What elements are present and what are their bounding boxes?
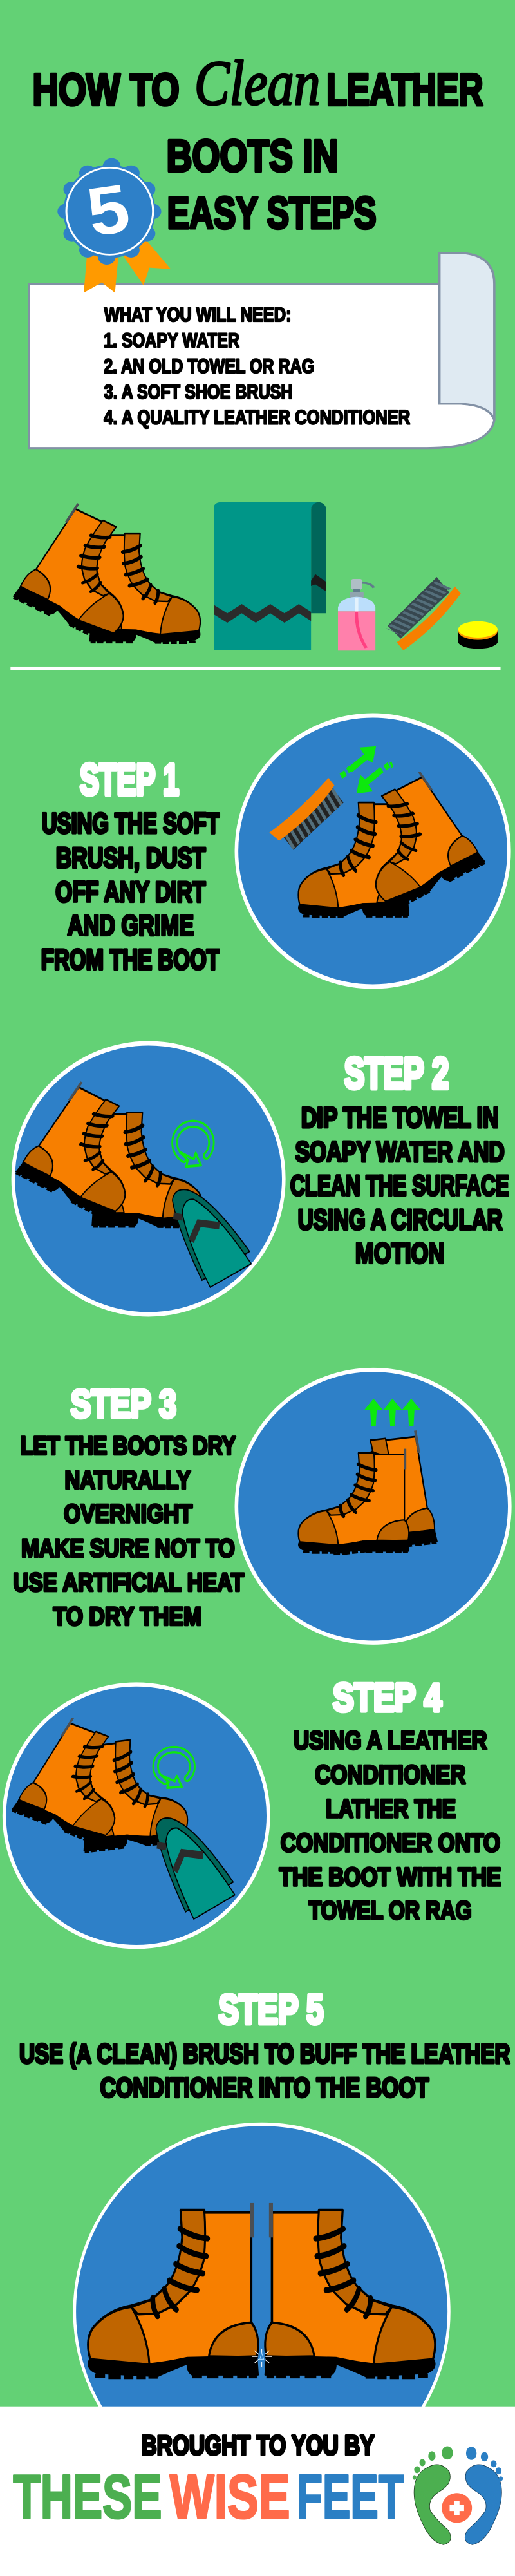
step 4 text bbox=[279, 1727, 501, 1926]
icon: soap spray bottle bbox=[338, 579, 375, 650]
logo wordmark: THESE bbox=[13, 2461, 162, 2532]
title: BOOTS IN bbox=[167, 130, 339, 181]
boots bbox=[10, 1703, 187, 1862]
step 2 text: USING A CIRCULAR bbox=[298, 1203, 503, 1236]
step 4 heading: STEP 4 bbox=[333, 1676, 442, 1720]
step 5 illustration circle bbox=[75, 2125, 449, 2499]
step 4 text: USING A LEATHER bbox=[294, 1727, 487, 1756]
right boot bbox=[265, 2203, 435, 2379]
step 3 text: TO DRY THEM bbox=[53, 1603, 201, 1631]
step 4 illustration circle bbox=[5, 1685, 268, 1947]
step 1 illustration circle bbox=[236, 715, 509, 987]
supplies list: 4. A QUALITY LEATHER CONDITIONER bbox=[104, 406, 410, 428]
title: EASY STEPS bbox=[167, 187, 377, 238]
step 3 text: USE ARTIFICIAL HEAT bbox=[13, 1568, 244, 1597]
step 1 text bbox=[41, 807, 220, 976]
supplies list bbox=[104, 303, 410, 428]
icon: shine sparkle bbox=[252, 2349, 272, 2367]
logo wordmark: WISE bbox=[170, 2461, 290, 2532]
footer: brought to you by bbox=[0, 2407, 515, 2576]
panel: step 1 bbox=[41, 715, 509, 987]
icon: towel rubbing boot bbox=[156, 1818, 235, 1919]
icon: brush bbox=[269, 778, 344, 850]
arrows: drying upward bbox=[364, 1399, 420, 1426]
supplies list: WHAT YOU WILL NEED: bbox=[104, 303, 292, 326]
step 5 text: CONDITIONER INTO THE BOOT bbox=[100, 2073, 429, 2103]
panel: step 3 bbox=[13, 1370, 510, 1643]
supplies list: 3. A SOFT SHOE BRUSH bbox=[104, 381, 293, 403]
step 2 heading: STEP 2 bbox=[344, 1049, 449, 1099]
panel: step 4 bbox=[5, 1676, 501, 1947]
logo: two feet with medical cross bbox=[413, 2447, 503, 2544]
step 3 text: LET THE BOOTS DRY bbox=[21, 1432, 236, 1461]
icon: circular motion arrow bbox=[156, 1750, 192, 1788]
icon: towel bbox=[214, 502, 326, 650]
title bbox=[33, 48, 483, 238]
step 4 text: TOWEL OR RAG bbox=[309, 1897, 472, 1926]
step 5 text bbox=[19, 2040, 510, 2103]
boots bbox=[14, 1081, 203, 1228]
step 1 text: FROM THE BOOT bbox=[41, 943, 220, 976]
arrows: back and forth bbox=[340, 746, 393, 793]
title: Clean bbox=[194, 48, 320, 118]
boots bbox=[299, 770, 487, 918]
supplies list: 1. SOAPY WATER bbox=[104, 329, 239, 352]
step 3 text: NATURALLY bbox=[65, 1466, 191, 1495]
icon: 5 steps rosette badge bbox=[57, 158, 171, 293]
step 4 text: LATHER THE bbox=[326, 1795, 456, 1824]
icon: conditioner tin bbox=[458, 621, 498, 649]
step 2 illustration circle bbox=[13, 1043, 284, 1314]
icon: towel rubbing boot bbox=[173, 1189, 251, 1287]
step 3 text: MAKE SURE NOT TO bbox=[21, 1535, 235, 1563]
supplies illustration row bbox=[10, 502, 501, 670]
step 3 text: OVERNIGHT bbox=[64, 1500, 192, 1529]
icon: pair of boots bbox=[12, 502, 200, 645]
step 2 text: MOTION bbox=[355, 1236, 444, 1269]
icon: circular motion arrow bbox=[174, 1124, 211, 1166]
step 1 text: AND GRIME bbox=[68, 909, 194, 942]
panel: what you will need scroll bbox=[29, 253, 494, 448]
header section bbox=[29, 48, 494, 448]
step 1 text: OFF ANY DIRT bbox=[55, 875, 206, 908]
step 1 text: USING THE SOFT bbox=[42, 807, 220, 839]
step 4 text: CONDITIONER ONTO bbox=[281, 1829, 500, 1858]
step 4 text: THE BOOT WITH THE bbox=[279, 1863, 501, 1891]
step 2 text: SOAPY WATER AND bbox=[295, 1135, 505, 1168]
title: HOW TO bbox=[33, 64, 180, 115]
step 3 illustration circle bbox=[236, 1370, 510, 1643]
step 2 text bbox=[290, 1101, 509, 1269]
boots bbox=[299, 1430, 438, 1557]
step 3 heading: STEP 3 bbox=[71, 1382, 176, 1426]
step 2 text: DIP THE TOWEL IN bbox=[301, 1101, 498, 1134]
icon: shoe brush bbox=[388, 577, 461, 650]
supplies list: 2. AN OLD TOWEL OR RAG bbox=[104, 355, 314, 377]
step 5 heading: STEP 5 bbox=[218, 1986, 324, 2033]
left boot bbox=[88, 2203, 258, 2379]
step 3 text bbox=[13, 1432, 244, 1631]
step 4 text: CONDITIONER bbox=[315, 1761, 465, 1789]
panel: step 5 bbox=[19, 1986, 510, 2499]
panel: step 2 bbox=[13, 1043, 509, 1314]
logo wordmark bbox=[13, 2461, 404, 2532]
step 1 text: BRUSH, DUST bbox=[56, 841, 206, 874]
logo wordmark: FEET bbox=[297, 2461, 404, 2532]
step 1 heading: STEP 1 bbox=[80, 755, 179, 805]
footer tagline: BROUGHT TO YOU BY bbox=[141, 2430, 375, 2461]
icon: 5 steps rosette badge: 5 bbox=[82, 169, 135, 251]
